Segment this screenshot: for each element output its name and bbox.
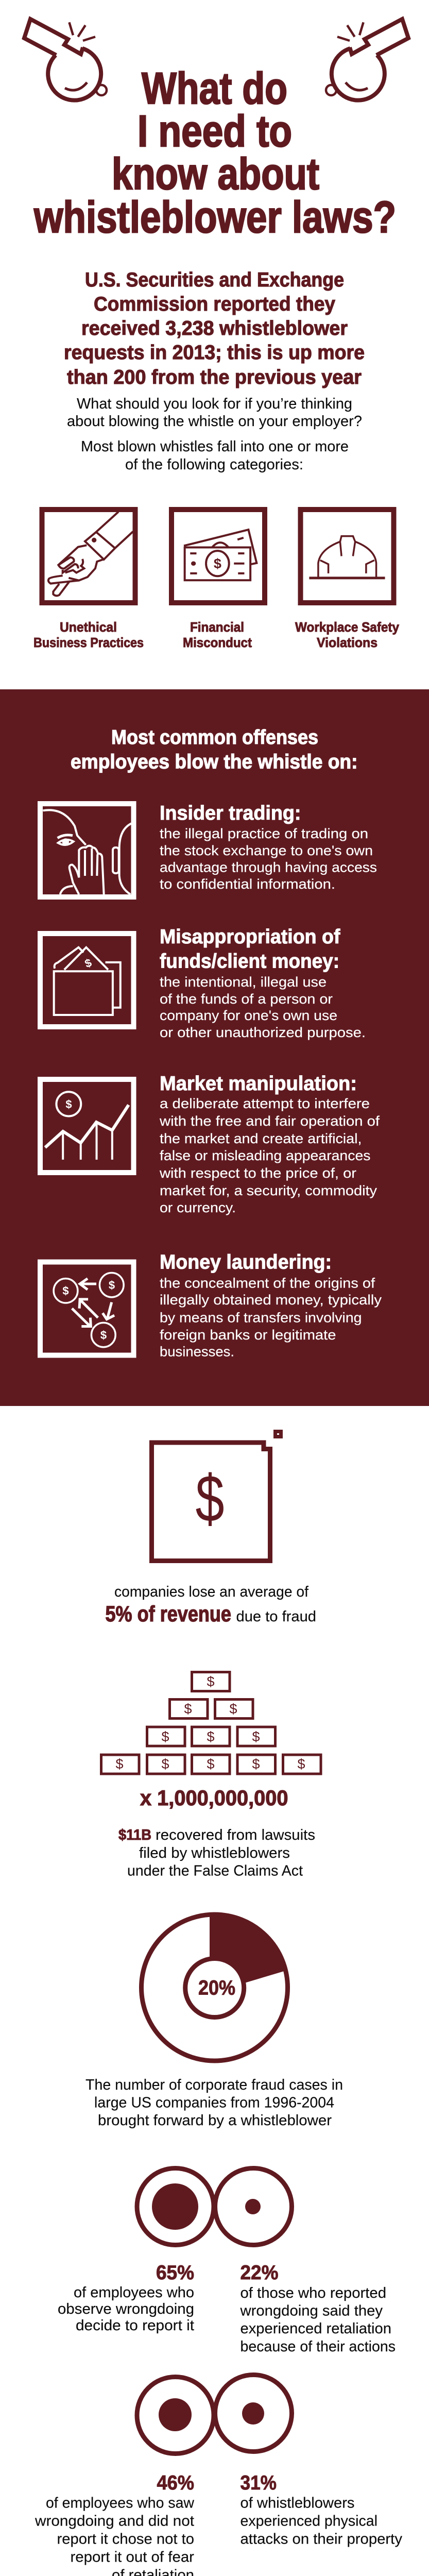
- chart: 46 and 31 percent rings: [137, 2375, 291, 2453]
- icon: hard hat in frame: [301, 510, 393, 603]
- icon: pyramid of dollar bills: $: [184, 1701, 192, 1717]
- subheading: SEC statistic: [64, 269, 365, 388]
- text: $11B recovered: filed by whistleblowers: [139, 1845, 290, 1861]
- text: 46 percent: report it chose not to: [57, 2531, 194, 2547]
- icon: pyramid of dollar bills: $: [115, 1756, 124, 1772]
- icon: money bills in frame: [171, 510, 265, 603]
- icon: pyramid of dollar bills: $: [252, 1756, 260, 1772]
- subheading: SEC statistic: Commission reported they: [94, 293, 335, 315]
- text: corporate fraud cases: [85, 2077, 343, 2129]
- category labels: Misconduct: [183, 635, 252, 650]
- icon: pyramid of dollar bills: $: [207, 1729, 215, 1744]
- title: [33, 64, 396, 242]
- panel heading: employees blow the whistle on:: [71, 751, 357, 773]
- subheading: SEC statistic: than 200 from the previous year: [67, 366, 362, 388]
- panel: most common offenses: [0, 689, 429, 1406]
- text: $11B recovered: recovered from lawsuits: [156, 1827, 315, 1843]
- text: 31 percent: [240, 2472, 402, 2547]
- icon: crossed fingers hand in frame: [42, 510, 135, 603]
- text: 65 percent: observe wrongdoing: [58, 2301, 194, 2317]
- title: I need to: [138, 107, 292, 156]
- text: 46 percent: of employees who saw: [46, 2495, 195, 2511]
- text: 46 percent: report it out of fear: [70, 2549, 194, 2566]
- icon: rising market chart in frame: [40, 1079, 134, 1173]
- text: insider trading: to confidential information.: [160, 876, 335, 892]
- text: 22 percent: experienced retaliation: [240, 2320, 391, 2337]
- icon: money bills in frame: $: [214, 556, 221, 571]
- text: market manipulation: market for, a security, commodity: [160, 1183, 377, 1198]
- text: 5 percent of revenue: companies lose an average of: [114, 1584, 309, 1600]
- text: money laundering: Money laundering:: [160, 1251, 332, 1274]
- icon: dollar document: [151, 1431, 281, 1561]
- text: 65 percent: 65%: [156, 2262, 194, 2284]
- text: insider trading: the illegal practice of trading on: [160, 826, 368, 841]
- category labels: Business Practices: [33, 635, 144, 650]
- text: 5 percent of revenue: due to fraud: [236, 1608, 316, 1625]
- icon: pyramid of dollar bills: $: [161, 1729, 169, 1744]
- text: market manipulation: with the free and fair operation of: [159, 1113, 380, 1129]
- icon: money transfer circles in frame: $: [62, 1284, 69, 1297]
- text: 46 percent: wrongdoing and did not: [35, 2513, 194, 2530]
- category labels: [33, 619, 400, 650]
- category labels: Unethical: [60, 619, 117, 635]
- text: corporate fraud cases: The number of corporate fraud cases in: [85, 2077, 343, 2093]
- text: 31 percent: 31%: [240, 2472, 277, 2494]
- text block: intro question: of the following categories:: [125, 456, 303, 473]
- text: misappropriation: [160, 926, 366, 1040]
- category labels: Violations: [317, 635, 377, 650]
- icon: pyramid of dollar bills: $: [297, 1756, 305, 1772]
- text: money laundering: by means of transfers involving: [160, 1310, 362, 1325]
- subheading: SEC statistic: requests in 2013; this is up more: [64, 342, 365, 364]
- text: market manipulation: Market manipulation:: [160, 1073, 357, 1095]
- text: money laundering: [160, 1251, 382, 1359]
- icon: rising market chart in frame: $: [65, 1098, 72, 1111]
- text: $11B recovered: under the False Claims Act: [127, 1863, 303, 1879]
- text: insider trading: the stock exchange to one's own: [160, 843, 373, 858]
- donut chart: 20 percent: [141, 1914, 287, 2061]
- icon: wallet in frame: $: [83, 956, 93, 970]
- text: misappropriation: company for one's own use: [160, 1008, 337, 1023]
- text: 31 percent: of whistleblowers: [240, 2495, 354, 2511]
- text: insider trading: [160, 802, 377, 892]
- text block: intro question: Most blown whistles fall into one or more: [81, 438, 349, 455]
- icon: whispering face in frame: [40, 804, 134, 897]
- icon: pyramid of dollar bills: $: [207, 1756, 215, 1772]
- text: misappropriation: Misappropriation of: [160, 926, 340, 948]
- category labels: Workplace Safety: [295, 619, 400, 635]
- text: 65 percent: decide to report it: [76, 2317, 194, 2334]
- text: 22 percent: [239, 2262, 396, 2355]
- text: $11B recovered: [118, 1827, 315, 1879]
- text: $11B recovered: $11B: [118, 1827, 151, 1843]
- text: 46 percent: 46%: [157, 2472, 194, 2494]
- text: corporate fraud cases: large US companies from 1996-2004: [94, 2095, 334, 2111]
- icon: money transfer circles in frame: $: [109, 1279, 115, 1292]
- subheading: SEC statistic: U.S. Securities and Exchange: [85, 269, 344, 291]
- icon: whistle right: [326, 19, 408, 100]
- text block: intro question: [67, 396, 362, 473]
- text: insider trading: Insider trading:: [160, 802, 301, 824]
- icon: pyramid of dollar bills: $: [207, 1674, 215, 1689]
- icon: money transfer circles in frame: $: [100, 1329, 107, 1342]
- title: know about: [112, 149, 319, 199]
- icon: dollar document: $: [196, 1461, 224, 1536]
- icon: money transfer circles in frame: [40, 1262, 134, 1355]
- icon: whistle left: [24, 19, 107, 100]
- text: 46 percent: [35, 2472, 195, 2576]
- panel heading: Most common offenses: [111, 726, 318, 749]
- title: What do: [142, 64, 287, 113]
- text: money laundering: businesses.: [160, 1344, 234, 1359]
- icon: pyramid of dollar bills: $: [252, 1729, 260, 1744]
- subheading: SEC statistic: received 3,238 whistleblower: [81, 317, 348, 340]
- text: 65 percent: of employees who: [74, 2284, 194, 2301]
- chart: 65 and 22 percent rings: [137, 2168, 291, 2245]
- text: corporate fraud cases: brought forward by a whistleblower: [98, 2112, 332, 2129]
- text: 5 percent of revenue: [105, 1584, 316, 1626]
- icon: pyramid of dollar bills: $: [161, 1756, 169, 1772]
- text: money laundering: the concealment of the origins of: [160, 1276, 375, 1291]
- text: 31 percent: attacks on their property: [240, 2531, 402, 2547]
- text: money laundering: foreign banks or legitimate: [160, 1327, 336, 1343]
- text: misappropriation: or other unauthorized purpose.: [160, 1025, 366, 1040]
- text: 31 percent: experienced physical: [240, 2513, 377, 2530]
- text: 22 percent: because of their actions: [240, 2338, 396, 2355]
- text: market manipulation: false or misleading appearances: [160, 1148, 371, 1163]
- panel heading: [71, 726, 357, 773]
- text: misappropriation: funds/client money:: [160, 950, 339, 973]
- text: misappropriation: of the funds of a person or: [160, 991, 333, 1007]
- text: 22 percent: of those who reported: [240, 2285, 386, 2301]
- text: money laundering: illegally obtained money, typically: [160, 1292, 382, 1308]
- donut chart: 20 percent: 20%: [198, 1976, 235, 1999]
- text: 22 percent: 22%: [240, 2262, 278, 2284]
- text block: intro question: What should you look for if you’re thinking: [77, 396, 352, 412]
- text: times one billion: x 1,000,000,000: [140, 1786, 288, 1810]
- text: market manipulation: a deliberate attempt to interfere: [160, 1096, 370, 1111]
- text: misappropriation: the intentional, illegal use: [160, 974, 327, 990]
- text: market manipulation: the market and create artificial,: [160, 1131, 362, 1146]
- text: market manipulation: [159, 1073, 380, 1215]
- icon: wallet in frame: [40, 934, 134, 1027]
- icon: pyramid of dollar bills: $: [229, 1701, 237, 1717]
- text: market manipulation: or currency.: [160, 1200, 236, 1215]
- category labels: Financial: [190, 619, 244, 635]
- text: 5 percent of revenue: 5% of revenue: [105, 1602, 231, 1626]
- icon: pyramid of dollar bills: [101, 1672, 321, 1774]
- text: market manipulation: with respect to the price of, or: [159, 1165, 356, 1181]
- text: 22 percent: wrongdoing said they: [239, 2303, 383, 2319]
- text: insider trading: advantage through having access: [160, 859, 377, 875]
- text: 65 percent: [58, 2262, 194, 2334]
- text block: intro question: about blowing the whistle on your employer?: [67, 413, 362, 430]
